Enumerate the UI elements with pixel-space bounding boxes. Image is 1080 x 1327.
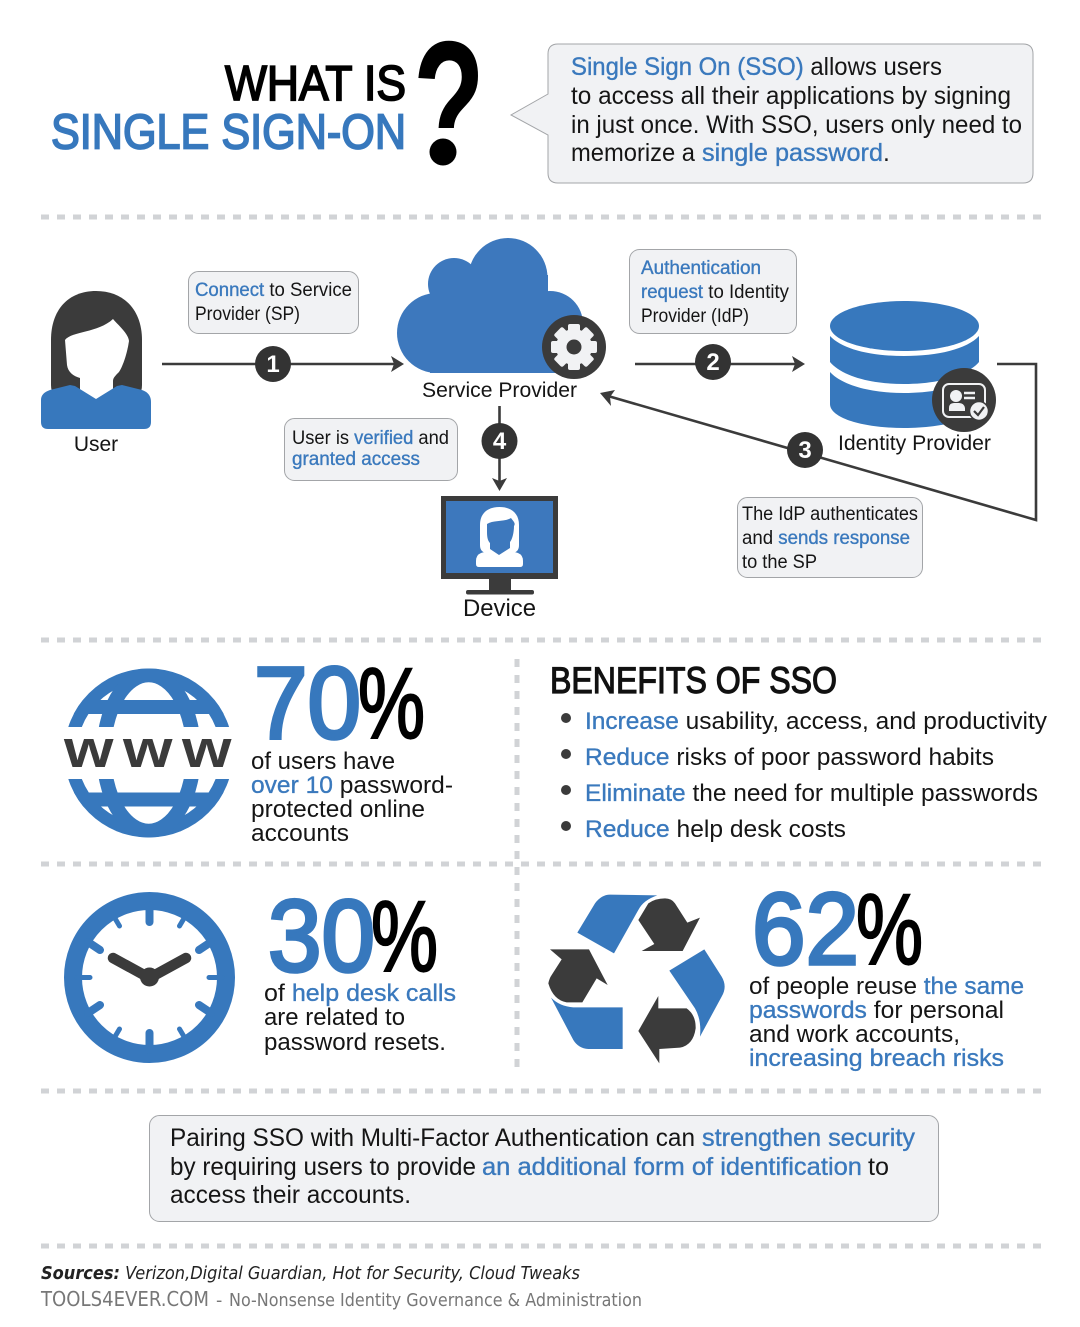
stat: 62 percent: of people reuse the same [749, 973, 1024, 1000]
stat: 30 percent: of help desk calls [264, 980, 456, 1007]
label: idp authenticates [738, 498, 922, 578]
callout: multi-factor authentication [150, 1116, 938, 1222]
stat: 70 percent: 70 [254, 646, 361, 760]
stat: 70 percent: of users have [251, 748, 395, 775]
footer: No-Nonsense Identity Governance & Administration [229, 1291, 642, 1311]
icon: www globe: w [181, 720, 232, 779]
arrow 1 [162, 346, 404, 382]
footer: TOOLS4EVER.COM [40, 1287, 209, 1311]
icon: database identity provider [830, 301, 996, 455]
callout: SSO definition: memorize a [571, 140, 695, 167]
heading: benefits of SSO: BENEFITS OF SSO [550, 660, 837, 701]
callout: SSO definition [511, 44, 1033, 183]
icon: database identity provider: Identity Provider [838, 432, 991, 455]
stat: 30 percent: are related to [264, 1004, 405, 1031]
stat: 62 percent: passwords for personal [749, 997, 1004, 1024]
callout: multi-factor authentication: by requiring users to provide [170, 1154, 476, 1181]
arrow 4 [482, 406, 518, 491]
stat: 30 percent: % [371, 881, 438, 993]
label: authentication request: Provider (IdP) [641, 306, 749, 327]
label: authentication request: Authentication [641, 258, 761, 279]
icon: clock [73, 901, 226, 1054]
label: authentication request [630, 250, 796, 334]
callout: SSO definition: in just once. With SSO, users only need to [571, 112, 1022, 139]
icon: www globe: w [63, 720, 114, 779]
stat: 62 percent: % [856, 874, 923, 986]
callout: SSO definition: to access all their applications by signing [571, 83, 1011, 110]
stat: 70 percent: % [358, 648, 425, 760]
benefits list: Reduce help desk costs [585, 816, 846, 843]
arrow 4: 4 [493, 428, 507, 455]
icon: www globe: w [122, 720, 173, 779]
stat: 30 percent: 30 [268, 879, 375, 993]
callout: multi-factor authentication: Pairing SSO with Multi-Factor Authentication can [170, 1125, 695, 1152]
stat: 70 percent: protected online [251, 796, 425, 823]
icon: cloud service provider: Service Provider [422, 379, 577, 402]
arrow 1: 1 [266, 351, 280, 378]
callout: multi-factor authentication: access their accounts. [170, 1182, 411, 1209]
arrow 3: 3 [798, 437, 812, 464]
footer [40, 1287, 642, 1311]
stat: 30 percent: password resets. [264, 1029, 446, 1056]
stat: 70 percent: accounts [251, 820, 349, 847]
arrow 2 [635, 344, 805, 380]
label: authentication request: request to Identity [641, 282, 789, 303]
sources: Sources: Verizon,Digital Guardian, Hot for Security, Cloud Tweaks [41, 1264, 580, 1284]
callout: SSO definition: single password [702, 140, 883, 167]
label: idp authenticates: The IdP authenticates [742, 504, 918, 525]
label: user verified: granted access [292, 449, 420, 470]
benefits list [561, 708, 1048, 843]
label: user verified: User is verified and [292, 428, 449, 449]
benefits list: Increase usability, access, and productivity [585, 708, 1048, 735]
label: user verified [284, 418, 458, 480]
label: idp authenticates: and sends response [742, 528, 910, 549]
label: connect to service provider: Connect to Service [195, 280, 352, 301]
arrow 3 [600, 364, 1036, 520]
title: WHAT IS [225, 57, 406, 111]
callout: SSO definition: . [883, 140, 890, 167]
stat: 62 percent: 62 [752, 872, 859, 986]
title: ? [413, 3, 485, 203]
arrow 2: 2 [706, 349, 720, 376]
title [52, 40, 478, 166]
icon: device monitor [441, 496, 558, 622]
stat: 70 percent [251, 646, 453, 847]
icon: recycle [548, 895, 725, 1063]
stat: 62 percent: increasing breach risks [749, 1045, 1004, 1072]
stat: 30 percent [264, 879, 456, 1056]
label: connect to service provider: Provider (SP) [195, 304, 300, 325]
title: SINGLE SIGN-ON [51, 106, 406, 160]
icon: user: User [74, 433, 118, 456]
footer: - [216, 1291, 222, 1311]
label: idp authenticates: to the SP [742, 552, 817, 573]
stat: 70 percent: over 10 password- [251, 772, 453, 799]
label: connect to service provider [188, 272, 358, 334]
callout: multi-factor authentication: to [868, 1154, 889, 1181]
icon: www globe [60, 674, 238, 832]
callout: multi-factor authentication: strengthen security [702, 1125, 916, 1152]
icon: cloud service provider [397, 238, 606, 402]
callout: multi-factor authentication: an additional form of identification [482, 1154, 862, 1181]
benefits list: Eliminate the need for multiple passwords [585, 780, 1038, 807]
callout: SSO definition: Single Sign On (SSO) allows users [571, 54, 942, 81]
icon: user [41, 291, 151, 456]
benefits list: Reduce risks of poor password habits [585, 744, 994, 771]
stat: 62 percent: and work accounts, [749, 1021, 960, 1048]
icon: device monitor: Device [463, 595, 536, 622]
stat: 62 percent [749, 872, 1024, 1072]
